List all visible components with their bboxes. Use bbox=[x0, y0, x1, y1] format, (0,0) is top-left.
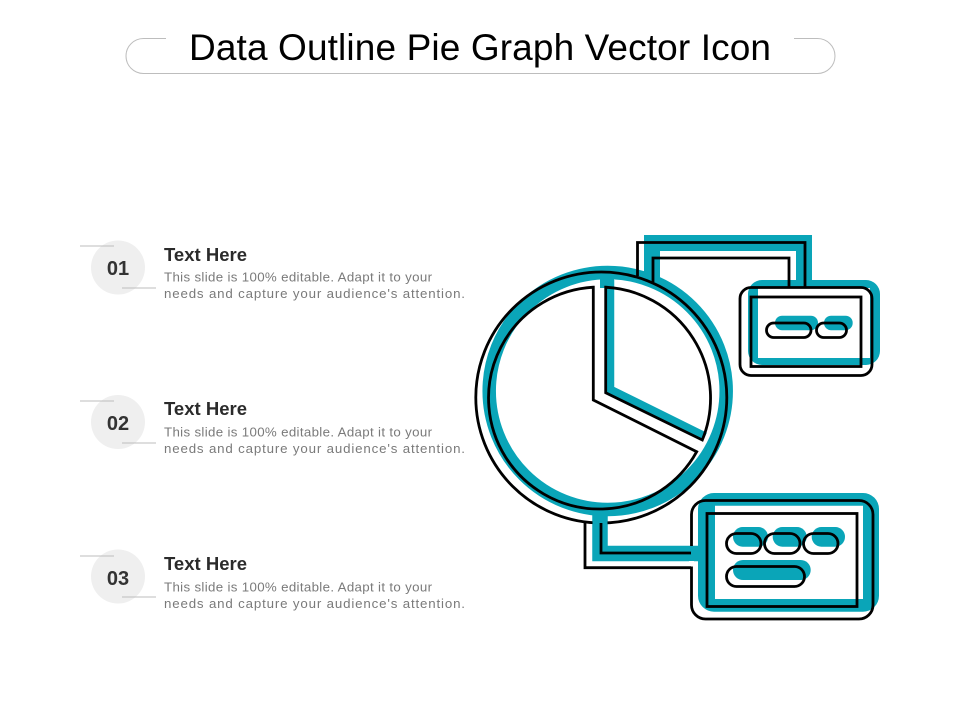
junction patch on bottom box edge bbox=[689, 546, 699, 566]
number badge 03: 03 bbox=[107, 568, 129, 590]
description 03: This slide is 100% editable. Adapt it to your bbox=[164, 580, 433, 594]
title outline bbox=[126, 38, 835, 74]
item 01 bbox=[80, 240, 465, 301]
top box pills bbox=[766, 323, 811, 338]
title: Data Outline Pie Graph Vector Icon bbox=[189, 27, 771, 68]
teal accent layer bbox=[489, 243, 880, 612]
icon: pie graph with data boxes bbox=[476, 242, 880, 619]
top connector bbox=[638, 242, 805, 287]
description 01: This slide is 100% editable. Adapt it to your bbox=[164, 270, 433, 284]
heading 01: Text Here bbox=[164, 244, 247, 265]
bottom box pills bbox=[726, 534, 761, 554]
description 02: This slide is 100% editable. Adapt it to your bbox=[164, 424, 433, 440]
number badge 02 bbox=[80, 395, 156, 449]
title bar bbox=[126, 27, 835, 74]
description 03: needs and capture your audience's attention. bbox=[164, 596, 465, 611]
black outline layer bbox=[476, 242, 873, 619]
heading 03: Text Here bbox=[164, 553, 247, 574]
small pie slice bbox=[606, 287, 711, 440]
item 03 bbox=[80, 550, 465, 611]
outer pie circle bbox=[476, 272, 727, 523]
number badge 02: 02 bbox=[107, 413, 129, 435]
description 02: needs and capture your audience's attention. bbox=[164, 441, 465, 456]
description 01: needs and capture your audience's attention. bbox=[164, 286, 465, 301]
teal stem over outer ring bbox=[592, 516, 608, 525]
bottom data box bbox=[692, 500, 873, 619]
number badge 03 bbox=[80, 550, 156, 604]
number badge 01: 01 bbox=[107, 258, 129, 280]
item 02 bbox=[80, 395, 465, 456]
large pie slice bbox=[489, 287, 697, 509]
bottom connector bbox=[585, 523, 691, 568]
top data box bbox=[740, 288, 872, 376]
number badge 01 bbox=[80, 240, 156, 294]
heading 02: Text Here bbox=[164, 398, 247, 419]
